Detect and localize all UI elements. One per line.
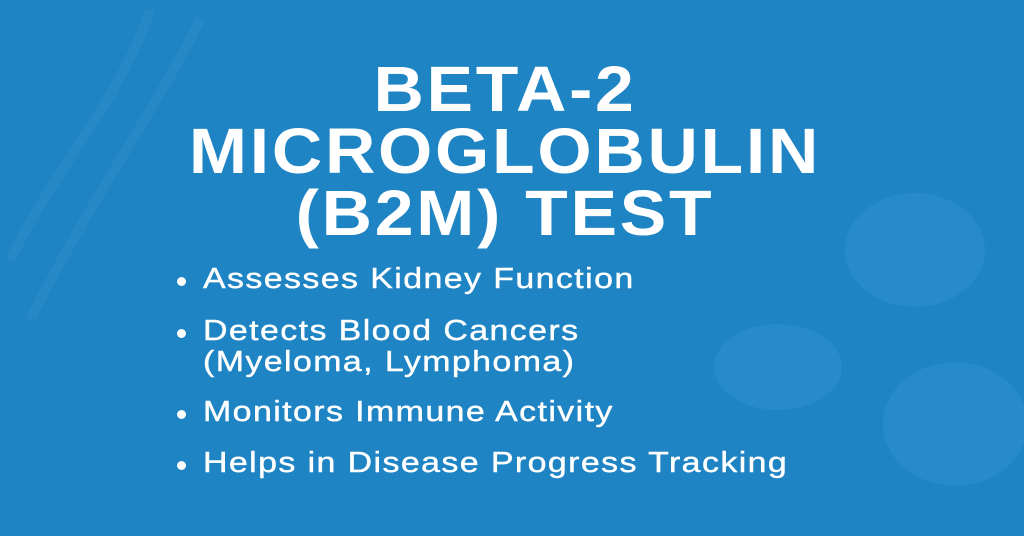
title: (B2M) TEST — [296, 177, 714, 249]
bullet: immune — [177, 396, 614, 428]
bullet list: (Myeloma, Lymphoma) — [203, 346, 575, 378]
bullet list: Helps in Disease Progress Tracking — [203, 447, 788, 479]
bullet list: Assesses Kidney Function — [203, 263, 635, 295]
title — [189, 53, 821, 249]
bullet list: Monitors Immune Activity — [203, 396, 614, 428]
title: MICROGLOBULIN — [189, 115, 821, 187]
bullet: progress — [177, 447, 788, 479]
bullet list: Detects Blood Cancers — [203, 315, 580, 347]
bullet: cancers — [177, 315, 580, 378]
bullet: kidney — [177, 263, 635, 295]
title: BETA-2 — [373, 53, 637, 125]
